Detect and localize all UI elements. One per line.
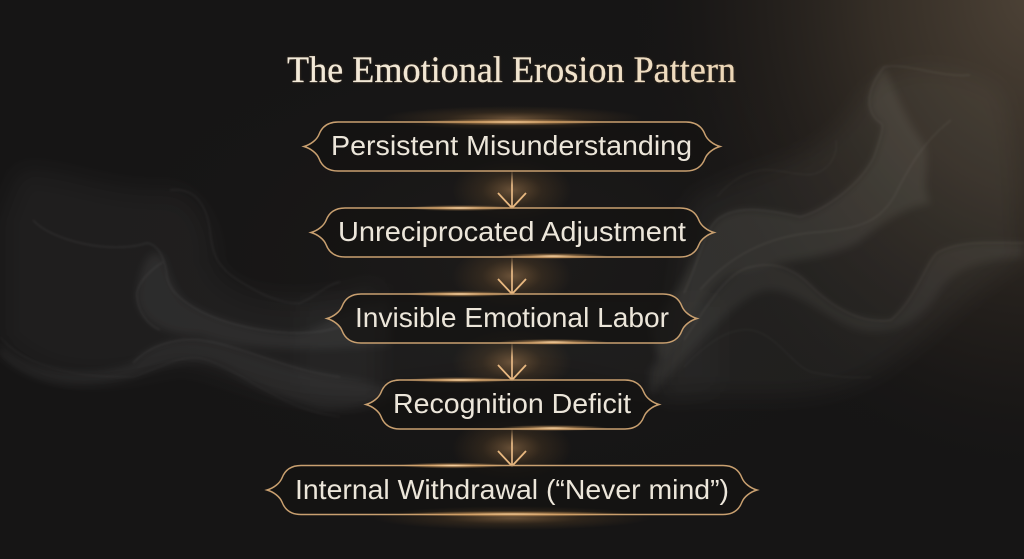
step 5: Internal Withdrawal (267, 462, 757, 530)
step 2: Unreciprocated Adjustment (311, 205, 714, 259)
step 2: Unreciprocated Adjustment: Unreciprocated Adjustment (338, 216, 686, 247)
step 4: Recognition Deficit (366, 377, 659, 431)
arrow: step 4 to 5 (452, 416, 572, 480)
arrow: step 2 to 3 (452, 244, 572, 308)
arrow: step 1 to 2 (452, 158, 572, 222)
title: The Emotional Erosion Pattern (287, 50, 736, 91)
step 3: Invisible Emotional Labor (327, 291, 697, 345)
smoke: left (0, 170, 400, 417)
step 1: Persistent Misunderstanding (304, 106, 720, 171)
step 3: Invisible Emotional Labor: Invisible Emotional Labor (355, 302, 669, 333)
title: The Emotional Erosion Pattern (287, 50, 736, 91)
arrow: step 3 to 4 (452, 330, 572, 394)
step 5: Internal Withdrawal: Internal Withdrawal (“Never mind”) (295, 474, 729, 505)
step 1: Persistent Misunderstanding: Persistent Misunderstanding (331, 130, 692, 161)
smoke: center (300, 300, 720, 396)
step 4: Recognition Deficit: Recognition Deficit (393, 388, 631, 419)
smoke: right (650, 66, 1024, 400)
